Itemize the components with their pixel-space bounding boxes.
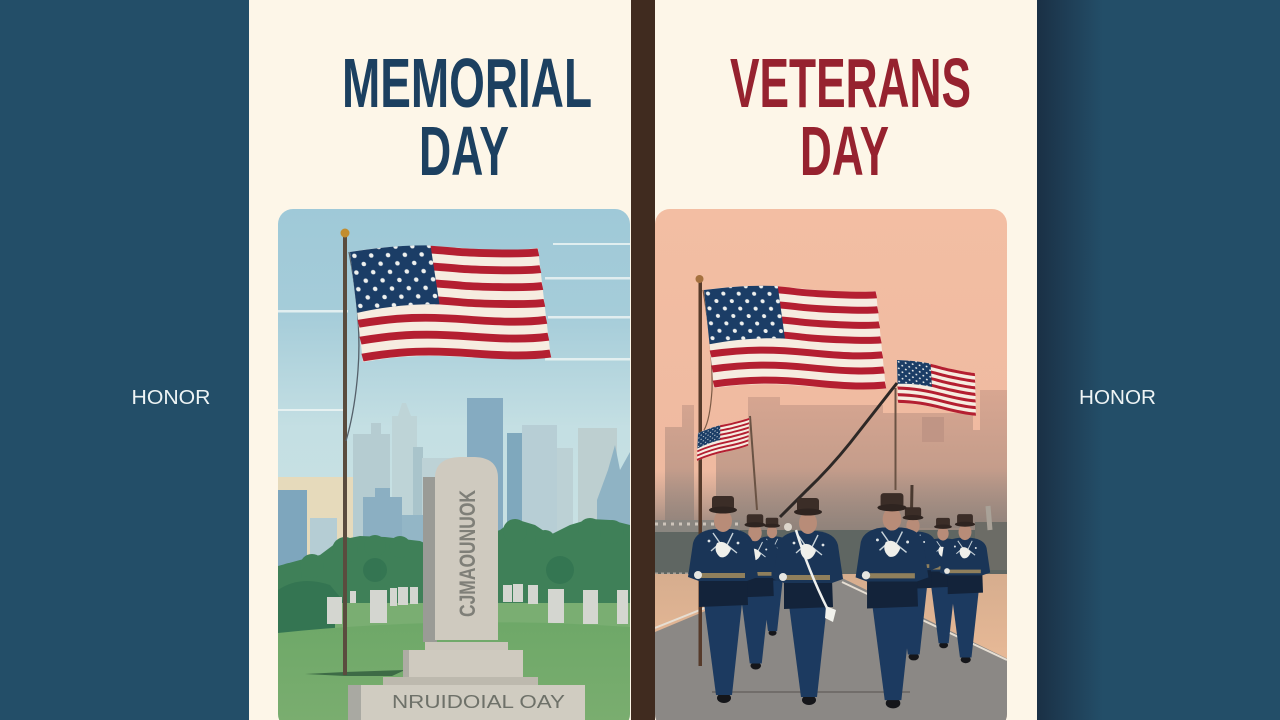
tree line [278, 518, 630, 633]
hazy city skyline [665, 390, 1007, 532]
small right flag [896, 358, 976, 490]
salute hand [784, 523, 792, 531]
bugle [988, 506, 990, 530]
center divider [631, 0, 655, 720]
city skyline [278, 398, 630, 578]
title: Memorial Day [342, 44, 592, 190]
sky [278, 209, 630, 720]
white glove [825, 606, 836, 622]
right side label: HONOR [1079, 386, 1156, 409]
title: Memorial Day: MEMORIAL [342, 44, 592, 122]
road [655, 578, 1010, 720]
large flag [704, 285, 886, 389]
panel: Memorial Day illustration [278, 209, 630, 720]
title: Veterans Day: DAY [800, 112, 889, 190]
white sash [796, 530, 828, 610]
monument vertical inscription: CJMAOUNUOK [455, 490, 480, 617]
diagonal flag staff [780, 383, 897, 517]
monument base inscription: NRUIDOIAL OAY [392, 692, 565, 712]
title: Veterans Day: VETERANS [730, 44, 971, 122]
cream poster panel [249, 0, 1037, 720]
sky [655, 209, 1007, 720]
city window block [922, 417, 944, 442]
tan roadside [655, 574, 1007, 658]
flag [349, 243, 551, 362]
right panel shadow [1037, 0, 1103, 720]
left side label: HONOR [132, 386, 210, 409]
monument [348, 457, 585, 720]
ground shadow [712, 691, 910, 693]
foreground grass [278, 622, 630, 720]
flagpole [340, 228, 359, 675]
distant crowd [655, 522, 1007, 575]
main flagpole [696, 275, 712, 666]
title: Veterans Day [730, 44, 971, 190]
panel: Veterans Day illustration [655, 209, 1010, 720]
soldiers marching [688, 493, 990, 708]
rows of headstones [327, 584, 628, 624]
rifle [911, 485, 912, 540]
peach horizon band [278, 477, 353, 555]
haze base [655, 477, 1007, 530]
small left flag [697, 416, 757, 510]
pole shadow [305, 670, 405, 676]
road edge lines [655, 582, 1007, 660]
back lawn [335, 603, 630, 628]
title: Memorial Day: DAY [419, 112, 509, 190]
